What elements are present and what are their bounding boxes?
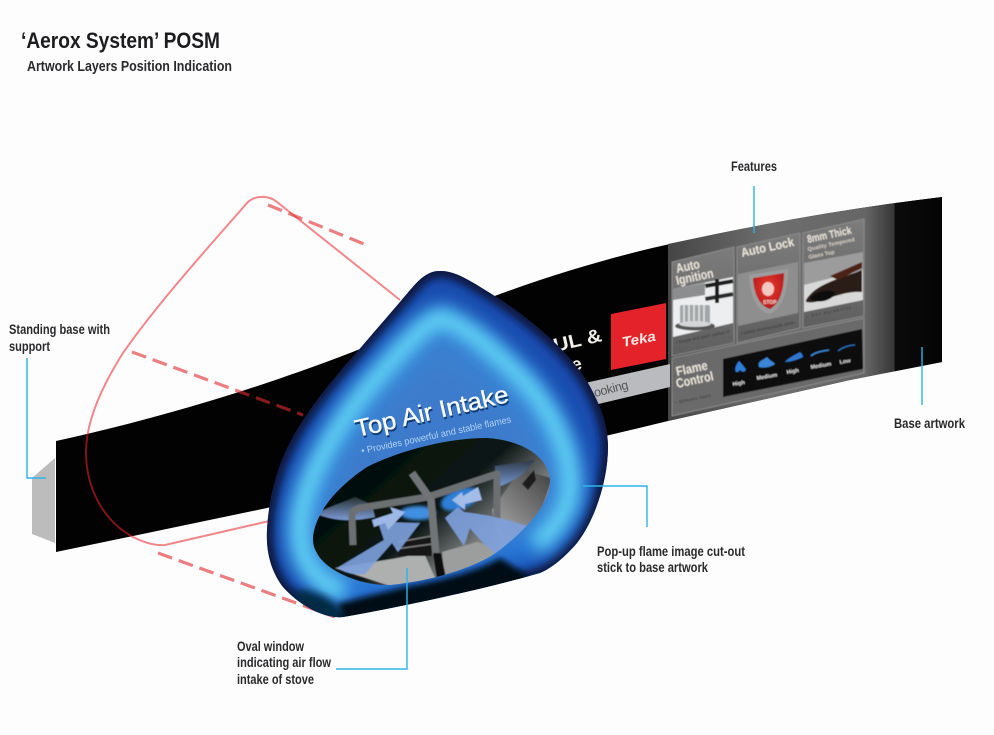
grey strapline bar — [585, 364, 670, 406]
black band — [56, 197, 942, 552]
pan support cross arm — [412, 473, 436, 555]
leader: oval window — [336, 568, 407, 669]
flame settings box — [723, 329, 863, 397]
blue burner glow left — [400, 506, 436, 520]
right gray plate — [492, 473, 550, 526]
blue plate left — [316, 497, 375, 520]
grey features background — [668, 197, 942, 421]
label: features: Features — [731, 159, 777, 174]
icon: high grill flame — [735, 361, 746, 372]
bottom plate right — [442, 542, 488, 574]
panel: auto ignition — [672, 247, 734, 356]
heading: top air intake face: Top Air Intake — [352, 381, 511, 443]
heading: control: Control — [675, 368, 715, 391]
subtitle: Artwork Layers Position Indication — [27, 59, 232, 75]
heading: 8mm thick: 8mm Thick — [806, 225, 853, 246]
label: Medium — [810, 361, 832, 371]
air arrow left — [337, 522, 420, 574]
lower spoke shadow — [433, 553, 446, 580]
leader: base artwork — [921, 347, 923, 405]
heading: auto lock: Auto Lock — [740, 235, 795, 260]
label: High — [732, 380, 746, 388]
headline fragment second line: e — [569, 353, 584, 375]
image: burner — [673, 277, 733, 337]
sub heading line 2: Glass Top — [808, 250, 836, 261]
label: standing base: Standing base with — [9, 322, 110, 337]
dark lower left corner — [294, 585, 341, 618]
base artwork band — [56, 197, 942, 552]
label: Medium — [756, 372, 778, 382]
headline fragment: UL & — [551, 325, 604, 357]
burner rings — [396, 536, 432, 556]
pop-up flame cut-out — [266, 271, 608, 618]
standing base outline — [86, 197, 400, 545]
heading: auto: Auto — [675, 256, 701, 276]
label: base artwork: Base artwork — [894, 416, 965, 431]
small arrow right — [452, 487, 482, 510]
oval window — [313, 438, 550, 585]
grey strapline bar: ooking — [592, 378, 630, 400]
caption: • Different flame — [675, 392, 712, 405]
feature panels group — [672, 219, 864, 416]
dashed guide lines — [132, 205, 369, 617]
label: pop-up flame: Pop-up flame image cut-out — [597, 544, 745, 559]
Teka logo: Teka — [621, 328, 657, 350]
label: standing base line 2: support — [9, 339, 50, 354]
image backdrop — [738, 262, 798, 326]
air arrow right — [445, 507, 530, 555]
icon: low heat flame — [838, 345, 855, 351]
standing base support — [32, 458, 55, 543]
leader: features — [753, 186, 755, 233]
small arrow left — [372, 507, 405, 530]
pan support frame — [352, 474, 497, 545]
blue plate right — [495, 460, 535, 488]
label: oval window: Oval window — [237, 639, 304, 654]
caption: • Simple and quick startup of — [675, 328, 731, 345]
Teka logo — [611, 303, 666, 370]
bottom plate left — [335, 553, 436, 586]
label: High — [786, 368, 800, 376]
caption: • For durability — [806, 305, 851, 319]
text: provides powerful and stable flames: • Provides powerful and stable flames — [360, 414, 513, 457]
sub heading: Quality Tempered — [807, 237, 855, 253]
heading: top air intake shadow: Top Air Intake — [353, 383, 512, 445]
leader: pop-up flame — [583, 486, 647, 527]
icon: red shield: STOP — [763, 300, 777, 306]
label: oval window line 3: intake of stove — [237, 672, 314, 687]
icon: medium grill flame — [759, 357, 775, 368]
bracket right — [522, 470, 536, 490]
dark foot of flame — [338, 558, 530, 622]
icon: high heat flame — [785, 352, 803, 362]
leader: standing base — [27, 358, 46, 478]
panel: 8mm glass top — [803, 219, 864, 328]
label: oval window line 2: indicating air flow — [237, 655, 331, 670]
caption: • Safety thermocouple shuts — [740, 320, 795, 336]
heading: flame: Flame — [675, 358, 709, 379]
image: glass top — [804, 252, 863, 312]
title: ‘Aerox System’ POSM — [21, 28, 220, 53]
icon: medium heat flame — [811, 350, 829, 356]
label: pop-up flame line 2: stick to base artwork — [597, 560, 708, 575]
blue burner glow right — [438, 486, 482, 513]
label: Low — [839, 358, 852, 366]
flame body shading — [266, 271, 608, 618]
panel: flame control — [672, 318, 864, 416]
panel: auto lock — [737, 233, 800, 343]
heading: ignition: Ignition — [675, 265, 715, 288]
